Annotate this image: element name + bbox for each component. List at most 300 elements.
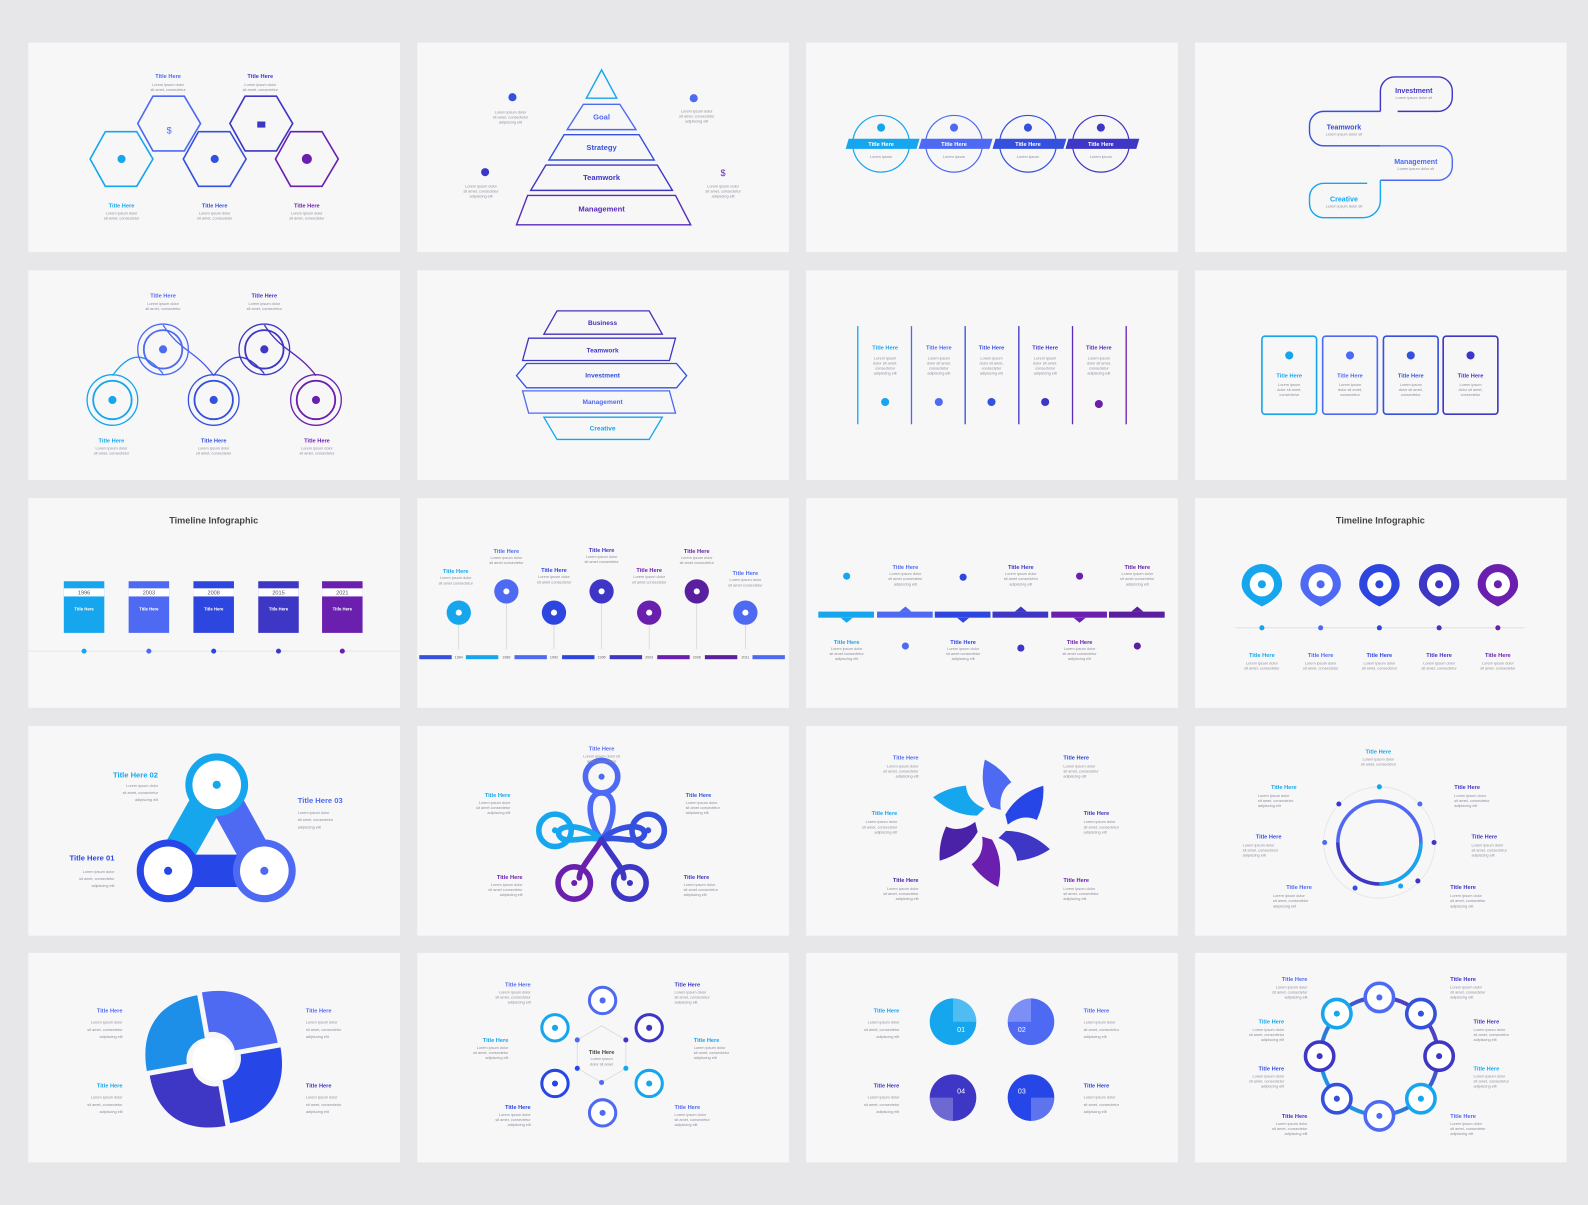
slide 11: horizontal bar timeline [806, 498, 1178, 708]
slide 7: vertical columns: Lorem ipsum [874, 356, 896, 360]
slide 12: pin timeline: Title Here [1485, 653, 1511, 659]
side notes: sit amet, consectetur [493, 115, 529, 119]
slide 7: vertical columns: Title Here [872, 345, 898, 351]
slide 11: horizontal bar timeline: Title Here [1124, 565, 1150, 571]
slide 16: ring diagram: Lorem ipsum dolor [1450, 894, 1483, 898]
bottom bar: 1992 [550, 656, 558, 660]
slide 7: vertical columns: Lorem ipsum [980, 356, 1003, 360]
banners: Title Here [868, 142, 894, 148]
slide 15: pinwheel: adipiscing elit [1063, 897, 1087, 901]
slide 10: zigzag timeline: Lorem ipsum dolor [538, 575, 571, 579]
wave line [112, 325, 316, 376]
banners: Title Here [1015, 142, 1041, 148]
side notes: adipiscing elit [685, 120, 709, 124]
slide 6: arrow stack: Creative [590, 425, 616, 432]
slide 11: horizontal bar timeline: sit amet consectetur [946, 652, 981, 656]
cards: 2003 [143, 590, 155, 596]
slide 6: arrow stack: Teamwork [587, 347, 619, 354]
slide 16: ring diagram: Lorem ipsum dolor [1454, 794, 1487, 798]
slide 4: snake boxes: Teamwork [1327, 124, 1361, 132]
slide 5: linked circles: Lorem ipsum dolor [301, 447, 334, 451]
slide 20: ring of eight circles: Lorem ipsum dolor [1450, 1122, 1483, 1126]
slide 10: zigzag timeline: Lorem ipsum dolor [491, 556, 523, 560]
slide 7: vertical columns: Lorem ipsum [1034, 356, 1056, 360]
slide 18: hexagonal cycle: sit amet, consectetur [495, 1118, 531, 1122]
slide 16: ring diagram: Title Here [1454, 785, 1480, 791]
slide 16: ring diagram: adipiscing elit [1273, 904, 1297, 908]
slide 10: zigzag timeline: Lorem ipsum dolor [440, 576, 472, 580]
slide 8: boxed steps: consectetur [1279, 393, 1300, 397]
side notes: $ [721, 168, 726, 178]
slide 18: hexagonal cycle: adipiscing elit [674, 1000, 698, 1004]
slide 12: pin timeline: sit amet, consectetur [1244, 666, 1280, 670]
labels: sit amet, consectetur [150, 88, 186, 92]
slide 20: ring of eight circles: sit amet, consectetur [1474, 1079, 1510, 1083]
slide 20: ring of eight circles: sit amet, consectetur [1450, 1127, 1486, 1131]
slide 16: ring diagram: adipiscing elit [1450, 904, 1474, 908]
slide 14: pentagon loops: Title Here [485, 793, 510, 799]
slide 14: pentagon loops: adipiscing elit [487, 811, 511, 815]
slide 18: hexagonal cycle: adipiscing elit [508, 1123, 532, 1127]
slide 15: pinwheel: sit amet, consectetur [1063, 892, 1099, 896]
slide 14: pentagon loops: amet consectetur [587, 759, 617, 763]
slide 7: vertical columns: dolor sit amet, [927, 362, 951, 366]
slide 20: ring of eight circles: Lorem ipsum dolor [1276, 1122, 1308, 1126]
slide 15: pinwheel: Lorem ipsum dolor [1063, 765, 1096, 769]
slide 2: pyramid: Management [578, 205, 625, 214]
slide 18: hexagonal cycle: dolor sit amet [590, 1062, 614, 1066]
slide 18: hexagonal cycle: Title Here [674, 1105, 700, 1111]
side notes: adipiscing elit [712, 194, 736, 198]
slide 17: donut: Lorem ipsum dolor [91, 1021, 123, 1025]
slide 13: trefoil: Title Here 01 [70, 854, 114, 863]
icons: $ [167, 126, 172, 136]
slide 20: ring of eight circles: adipiscing elit [1261, 1085, 1285, 1089]
bottom bar: 2008 [693, 656, 701, 660]
slide 14: pentagon loops: Lorem ipsum dolor sit [583, 754, 621, 758]
slide 11: horizontal bar timeline: Lorem ipsum dolor [1121, 572, 1154, 576]
slide 17: donut: adipiscing elit [306, 1110, 330, 1114]
slide 16: ring diagram: adipiscing elit [1243, 854, 1267, 858]
slide 8: boxed steps: Title Here [1276, 374, 1302, 380]
slide 1: hexagon process [28, 43, 400, 252]
labels: sit amet, consectetur [197, 217, 233, 221]
slide 20: ring of eight circles: Title Here [1282, 1114, 1307, 1120]
slide 18: hexagonal cycle: Lorem ipsum dolor [499, 990, 531, 994]
bottom bar: 2003 [645, 656, 653, 660]
slide 14: pentagon loops: sit amet consectetur [488, 888, 523, 892]
slide 7: vertical columns: consectetur [875, 367, 896, 371]
slide 18: hexagonal cycle: Title Here [694, 1038, 719, 1044]
slide 19: four numbered circles: Title Here [874, 1009, 899, 1015]
slide 20: ring of eight circles: Lorem ipsum dolor [1474, 1028, 1506, 1032]
slide 20: ring of eight circles: sit amet, consectetur [1249, 1033, 1285, 1037]
slide 10: zigzag timeline: Title Here [589, 548, 614, 554]
slide 10: zigzag timeline: Title Here [636, 568, 662, 574]
slide 13: trefoil: Lorem ipsum dolor [126, 784, 159, 788]
slide 16: ring diagram: Lorem ipsum dolor [1243, 844, 1275, 848]
slide 20: ring of eight circles: Title Here [1258, 1020, 1284, 1026]
slide 12: pin timeline: Lorem ipsum dolor [1305, 661, 1337, 665]
labels: Title Here [109, 204, 134, 210]
slide 18: hexagonal cycle: Lorem ipsum dolor [674, 990, 707, 994]
slide 6: arrow stack: Management [582, 399, 623, 406]
slide 20: ring of eight circles: adipiscing elit [1474, 1085, 1497, 1089]
slide 18: hexagonal cycle: Lorem ipsum dolor [499, 1113, 531, 1117]
slide 7: vertical columns: Title Here [979, 345, 1004, 351]
slide 18: hexagonal cycle: adipiscing elit [674, 1123, 698, 1127]
slide 15: pinwheel: sit amet, consectetur [883, 892, 919, 896]
slide 6: arrow stack: Business [588, 320, 618, 327]
slide 12: pin timeline [1195, 498, 1567, 708]
slide 15: pinwheel: Lorem ipsum dolor [866, 820, 898, 824]
slide 5: linked circles: sit amet, consectetur [299, 452, 335, 456]
slide 20: ring of eight circles: adipiscing elit [1450, 1132, 1474, 1136]
slide 11: horizontal bar timeline: adipiscing elit [952, 657, 976, 661]
slide 11: horizontal bar timeline: sit amet consectetur [1004, 577, 1039, 581]
slide 20: ring of eight circles: sit amet, consectetur [1450, 990, 1486, 994]
slide 16: ring diagram: Title Here [1472, 834, 1497, 840]
slide 12: pin timeline: Lorem ipsum dolor [1423, 661, 1456, 665]
slide 17: donut: sit amet, consectetur [306, 1103, 342, 1107]
slide 11: horizontal bar timeline: adipiscing elit [1126, 582, 1150, 586]
slide 19: four numbered circles: Title Here [1084, 1009, 1109, 1015]
labels: sit amet, consectetur [243, 88, 279, 92]
slide 19: four numbered circles: 03 [1018, 1088, 1026, 1096]
slide 17: donut: Lorem ipsum dolor [306, 1096, 338, 1100]
slide 20: ring of eight circles: Lorem ipsum dolor [1450, 985, 1483, 989]
slide 2: pyramid [417, 43, 789, 252]
slide 7: vertical columns: adipiscing elit [927, 372, 951, 376]
slide 7: vertical columns: adipiscing elit [874, 372, 898, 376]
bottom bar [419, 655, 785, 660]
slide 12: pin timeline: Timeline Infographic [1336, 516, 1425, 526]
slide 17: donut: Lorem ipsum dolor [306, 1021, 338, 1025]
slide 13: trefoil: Title Here 03 [298, 796, 343, 805]
slide 18: hexagonal cycle: sit amet, consectetur [495, 995, 531, 999]
slide 15: pinwheel: Lorem ipsum dolor [887, 765, 919, 769]
slide 18: hexagonal cycle: Lorem ipsum dolor [477, 1046, 509, 1050]
slide 10: zigzag timeline: sit amet consectetur [537, 580, 572, 584]
slide 13: trefoil: adipiscing elit [135, 798, 159, 802]
slide 13: trefoil: sit amet, consectetur [298, 818, 334, 822]
slide 8: boxed steps: Lorem ipsum [1339, 383, 1361, 387]
slide 5: linked circles: Lorem ipsum dolor [198, 447, 230, 451]
labels: sit amet, consectetur [289, 217, 325, 221]
slide 8: boxed steps [1195, 270, 1567, 480]
slide 19: four numbered circles: 02 [1018, 1026, 1026, 1034]
slide 18: hexagonal cycle: sit amet, consectetur [473, 1051, 509, 1055]
cards [64, 581, 363, 654]
slide 6: arrow stack: Investment [585, 373, 621, 380]
slide 5: linked circles: Title Here [304, 439, 330, 445]
slide 13: trefoil: adipiscing elit [298, 825, 322, 829]
slide 19: four numbered circles: adipiscing elit [876, 1110, 900, 1114]
slide 10: zigzag timeline [417, 498, 789, 708]
slide 19: four numbered circles: sit amet, consectetur [1084, 1103, 1120, 1107]
cards: 2021 [336, 590, 348, 596]
slide 17: donut: Title Here [97, 1009, 123, 1015]
labels: Title Here [155, 74, 181, 80]
slide 10: zigzag timeline: sit amet consectetur [728, 583, 763, 587]
slide 18: hexagonal cycle: Lorem ipsum [591, 1057, 613, 1061]
slide 4: snake boxes [1195, 43, 1567, 252]
slide 10: zigzag timeline: sit amet consectetur [584, 560, 619, 564]
labels [104, 74, 325, 221]
slide 15: pinwheel: adipiscing elit [1084, 830, 1108, 834]
slide 12: pin timeline: Title Here [1367, 653, 1392, 659]
slide 13: trefoil: Title Here 02 [113, 771, 158, 780]
slide 11: horizontal bar timeline: Title Here [893, 565, 918, 571]
slide 16: ring diagram: Title Here [1366, 749, 1391, 755]
banners: Title Here [941, 142, 967, 148]
slide 19: four numbered circles: Lorem ipsum dolor [868, 1096, 900, 1100]
cards: Title Here [269, 607, 289, 612]
slide 19: four numbered circles: Lorem ipsum dolor [1084, 1021, 1116, 1025]
side notes: sit amet, consectetur [705, 189, 741, 193]
slide 8: boxed steps: consectetur [1401, 393, 1421, 397]
slide 10: zigzag timeline: Lorem ipsum dolor [730, 578, 762, 582]
slide 15: pinwheel: sit amet, consectetur [862, 825, 898, 829]
slide 15: pinwheel: adipiscing elit [1063, 775, 1087, 779]
side notes: sit amet, consectetur [463, 189, 499, 193]
slide 15: pinwheel: Title Here [893, 878, 919, 884]
slide 20: ring of eight circles: adipiscing elit [1261, 1038, 1285, 1042]
slide 8: boxed steps: dolor sit amet, [1338, 388, 1362, 392]
side notes: Lorem ipsum dolor [495, 110, 527, 114]
slide 7: vertical columns: dolor sit amet, [1087, 362, 1111, 366]
labels: Lorem ipsum dolor [291, 212, 323, 216]
slide 12: pin timeline: Title Here [1426, 653, 1452, 659]
slide 14: pentagon loops: adipiscing elit [686, 811, 710, 815]
banners: Lorem ipsum [870, 155, 892, 159]
slide 5: linked circles: sit amet, consectetur [196, 452, 232, 456]
slide 15: pinwheel: Lorem ipsum dolor [887, 887, 919, 891]
slide 15: pinwheel: Title Here [1063, 755, 1089, 761]
slide 16: ring diagram: Lorem ipsum dolor [1472, 844, 1504, 848]
side notes: Lorem ipsum dolor [707, 184, 740, 188]
slide 18: hexagonal cycle: Title Here [505, 982, 531, 988]
slide 7: vertical columns: adipiscing elit [1087, 372, 1111, 376]
title: Timeline Infographic [169, 516, 258, 526]
slide 14: pentagon loops: Lorem ipsum dolor [686, 801, 718, 805]
slide 5: linked circles: Title Here [201, 439, 227, 445]
slide 10: zigzag timeline: Lorem ipsum dolor [586, 555, 618, 559]
slide 19: four numbered circles: sit amet, consectetur [1084, 1028, 1120, 1032]
slide 17: donut: Lorem ipsum dolor [91, 1096, 123, 1100]
slide 19: four numbered circles [806, 953, 1178, 1162]
slide 18: hexagonal cycle: Title Here [674, 982, 700, 988]
slide 7: vertical columns: consectetur [1035, 367, 1056, 371]
slide 10: zigzag timeline: sit amet consectetur [489, 561, 524, 565]
side notes: Lorem ipsum dolor [681, 109, 713, 113]
slide 11: horizontal bar timeline: Lorem ipsum dolor [890, 572, 922, 576]
slide 15: pinwheel: sit amet, consectetur [883, 770, 919, 774]
slide 20: ring of eight circles: Lorem ipsum dolor [1252, 1074, 1285, 1078]
slide 7: vertical columns: dolor sit amet, [873, 362, 897, 366]
slide 8: boxed steps: Title Here [1458, 374, 1483, 380]
slide 10: zigzag timeline: sit amet consectetur [680, 561, 715, 565]
slide 7: vertical columns: adipiscing elit [1034, 372, 1058, 376]
bottom bar: 1995 [598, 656, 606, 660]
slide 14: pentagon loops: adipiscing elit [500, 893, 524, 897]
slide 14: pentagon loops: Title Here [497, 875, 523, 881]
slide 19: four numbered circles: adipiscing elit [1084, 1110, 1108, 1114]
slide 16: ring diagram: Title Here [1256, 834, 1282, 840]
slide 16: ring diagram: adipiscing elit [1472, 854, 1495, 858]
slide 18: hexagonal cycle: Title Here [483, 1038, 508, 1044]
slide 12: pin timeline: sit amet, consectetur [1303, 666, 1339, 670]
slide 8: boxed steps: Lorem ipsum [1278, 383, 1300, 387]
slide 10: zigzag timeline: Lorem ipsum dolor [681, 556, 713, 560]
slide 17: donut: sit amet, consectetur [87, 1103, 123, 1107]
slide 16: ring diagram [1195, 726, 1567, 936]
slide 16: ring diagram: adipiscing elit [1258, 804, 1282, 808]
slide 18: hexagonal cycle: Lorem ipsum dolor [694, 1046, 726, 1050]
bottom bar: 2011 [741, 656, 749, 660]
slide 16: ring diagram: adipiscing elit [1454, 804, 1478, 808]
banners [846, 124, 1139, 159]
slide 7: vertical columns: dolor sit amet, [979, 362, 1004, 366]
bottom bar: 1984 [455, 656, 463, 660]
banners: Lorem ipsum [943, 155, 965, 159]
slide 8: boxed steps: dolor sit amet, [1277, 388, 1301, 392]
slide 11: horizontal bar timeline: sit amet consectetur [830, 652, 865, 656]
slide 5: linked circles: Lorem ipsum dolor [147, 302, 180, 306]
slide 11: horizontal bar timeline: Lorem ipsum dolor [831, 647, 863, 651]
slide 8: boxed steps: Title Here [1398, 374, 1424, 380]
slide 16: ring diagram: sit amet, consectetur [1472, 849, 1508, 853]
slide 7: vertical columns: Lorem ipsum [1088, 356, 1110, 360]
cards: 1996 [78, 590, 90, 596]
slide 5: linked circles [28, 270, 400, 480]
slide 16: ring diagram: Lorem ipsum dolor [1363, 757, 1395, 761]
banners: Lorem ipsum [1090, 155, 1112, 159]
slide 13: trefoil: Lorem ipsum dolor [298, 811, 330, 815]
slide 20: ring of eight circles: adipiscing elit [1450, 995, 1474, 999]
slide 19: four numbered circles: adipiscing elit [1084, 1035, 1108, 1039]
slide 13: trefoil: Lorem ipsum dolor [83, 870, 115, 874]
slide 12: pin timeline: sit amet, consectetur [1362, 666, 1398, 670]
slide 18: hexagonal cycle: sit amet, consectetur [674, 1118, 711, 1122]
slide 16: ring diagram: sit amet, consectetur [1243, 849, 1279, 853]
slide 17: donut: Title Here [306, 1009, 332, 1015]
labels: Title Here [247, 74, 273, 80]
slide 20: ring of eight circles: Lorem ipsum dolor [1276, 985, 1308, 989]
slide 8: boxed steps: Title Here [1337, 374, 1363, 380]
slide 4: snake boxes: Creative [1330, 196, 1358, 204]
slide 12: pin timeline: Title Here [1249, 653, 1275, 659]
slide 13: trefoil [28, 726, 400, 936]
slide 14: pentagon loops: Title Here [686, 793, 711, 799]
slide 11: horizontal bar timeline: adipiscing elit [1068, 657, 1092, 661]
slide 15: pinwheel: adipiscing elit [896, 897, 920, 901]
slide 5: linked circles: Title Here [99, 439, 124, 445]
slide 7: vertical columns: Title Here [1086, 345, 1112, 351]
slide 10: zigzag timeline: Lorem ipsum dolor [633, 575, 666, 579]
slide 7: vertical columns: Title Here [1032, 345, 1058, 351]
slide 7: vertical columns: adipiscing elit [980, 372, 1004, 376]
labels: Lorem ipsum dolor [199, 212, 231, 216]
pyramid [517, 70, 691, 225]
slide 14: pentagon loops: sit amet consectetur [476, 806, 511, 810]
labels: Title Here [294, 204, 320, 210]
cards: 2015 [272, 590, 285, 596]
banners: Title Here [1088, 142, 1114, 148]
slide 14: pentagon loops: Lorem ipsum dolor [491, 883, 523, 887]
slide 20: ring of eight circles: Title Here [1258, 1066, 1284, 1072]
hexagons [90, 96, 338, 186]
slide 12: pin timeline: Title Here [1308, 653, 1333, 659]
banners: Lorem ipsum [1017, 155, 1039, 159]
slide 15: pinwheel: Title Here [872, 811, 897, 817]
slide 7: vertical columns: consectetur [1089, 367, 1109, 371]
slide 4: snake boxes: Investment [1395, 87, 1433, 95]
slide 18: hexagonal cycle: Title Here [589, 1050, 614, 1056]
slide 14: pentagon loops: sit amet consectetur [684, 888, 719, 892]
slide 12: pin timeline: sit amet, consectetur [1421, 666, 1458, 670]
slide 5: linked circles: Title Here [251, 294, 277, 300]
slide 4: snake boxes: Lorem ipsum dolor sit [1326, 133, 1363, 137]
cards: Title Here [333, 607, 353, 612]
slide 20: ring of eight circles: sit amet, consectetur [1249, 1079, 1285, 1083]
slide 3: circles with banners [806, 43, 1178, 252]
slide 10: zigzag timeline: Title Here [684, 549, 710, 555]
slide 19: four numbered circles: Title Here [874, 1084, 899, 1090]
slide 16: ring diagram: sit amet, consectetur [1454, 799, 1490, 803]
slide 20: ring of eight circles: sit amet, consectetur [1474, 1033, 1510, 1037]
slide 17: donut: adipiscing elit [100, 1110, 123, 1114]
slide 20: ring of eight circles: sit amet, consectetur [1272, 1127, 1308, 1131]
labels: sit amet, consectetur [104, 217, 140, 221]
slide 18: hexagonal cycle: Title Here [505, 1105, 531, 1111]
slide 18: hexagonal cycle: Lorem ipsum dolor [674, 1113, 707, 1117]
bottom bar: 1989 [502, 656, 510, 660]
slide 20: ring of eight circles: Title Here [1474, 1020, 1499, 1026]
slide 20: ring of eight circles: sit amet, consectetur [1272, 990, 1308, 994]
slide 17: donut: adipiscing elit [306, 1035, 330, 1039]
slide 17: donut [28, 953, 400, 1162]
slide 11: horizontal bar timeline: adipiscing elit [835, 657, 859, 661]
slide 7: vertical columns: consectetur [982, 367, 1002, 371]
slide 15: pinwheel: Title Here [893, 755, 919, 761]
slide 14: pentagon loops: Lorem ipsum dolor [684, 883, 716, 887]
slide 20: ring of eight circles: Title Here [1282, 977, 1307, 983]
slide 4: snake boxes: Lorem ipsum dolor sit [1326, 205, 1363, 209]
slide 16: ring diagram: sit amet, consectetur [1273, 899, 1309, 903]
slide 19: four numbered circles: 01 [957, 1026, 965, 1034]
slide 2: pyramid: Teamwork [583, 173, 621, 182]
slide 7: vertical columns: dolor sit amet, [1033, 362, 1057, 366]
slide 15: pinwheel: adipiscing elit [896, 775, 920, 779]
slide 5: linked circles: Lorem ipsum dolor [96, 447, 128, 451]
slide 17: donut: sit amet, consectetur [87, 1028, 123, 1032]
slide 18: hexagonal cycle: sit amet, consectetur [674, 995, 711, 999]
slide 20: ring of eight circles: adipiscing elit [1284, 1132, 1308, 1136]
slide 20: ring of eight circles: Lorem ipsum dolor [1474, 1074, 1506, 1078]
slide 5: linked circles: sit amet, consectetur [145, 307, 181, 311]
slide 10: zigzag timeline: Title Here [443, 569, 469, 575]
slide 17: donut: Title Here [97, 1084, 123, 1090]
slide 18: hexagonal cycle: adipiscing elit [508, 1000, 532, 1004]
slide 20: ring of eight circles: Title Here [1474, 1066, 1499, 1072]
slide 11: horizontal bar timeline: Lorem ipsum dolor [1005, 572, 1037, 576]
slide 18: hexagonal cycle: adipiscing elit [485, 1056, 509, 1060]
labels: Lorem ipsum dolor [152, 83, 185, 87]
slide 11: horizontal bar timeline: Lorem ipsum dolor [1064, 647, 1096, 651]
slide 10: zigzag timeline: Title Here [494, 549, 519, 555]
icons [117, 122, 312, 164]
